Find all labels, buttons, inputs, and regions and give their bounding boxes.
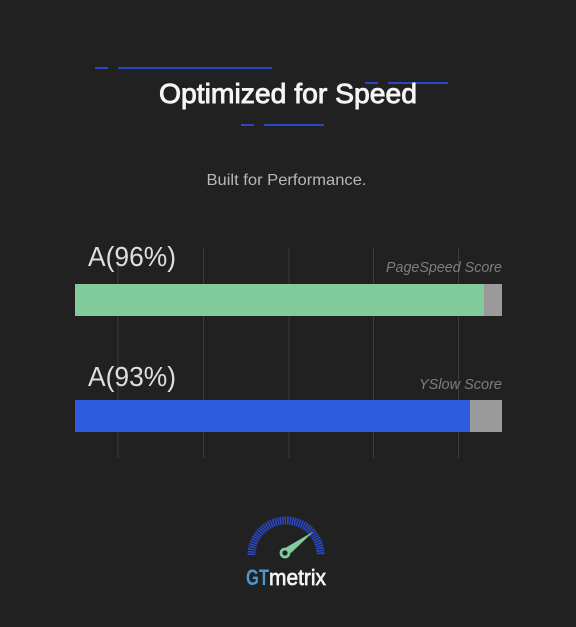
icon: speedometer gauge [252,520,320,557]
YSlow grade: A(93%) [88,361,176,392]
YSlow fill [75,400,470,432]
bar: YSlow score [75,361,502,432]
PageSpeed track [75,284,502,316]
bar: PageSpeed score [75,241,502,316]
YSlow label: YSlow Score [419,376,502,393]
GTmetrix logo [246,520,326,590]
decorative dashes around title [95,67,448,126]
YSlow track [75,400,502,432]
PageSpeed label: PageSpeed Score [386,259,502,276]
PageSpeed grade: A(96%) [88,241,176,272]
wordmark: GT: GT [246,565,269,590]
icon: needle [281,532,314,557]
subtitle: Built for Performance. [206,172,366,189]
title: Optimized for Speed [159,78,417,109]
wordmark: metrix: metrix [269,565,326,590]
logo wordmark [246,565,326,590]
PageSpeed fill [75,284,484,316]
